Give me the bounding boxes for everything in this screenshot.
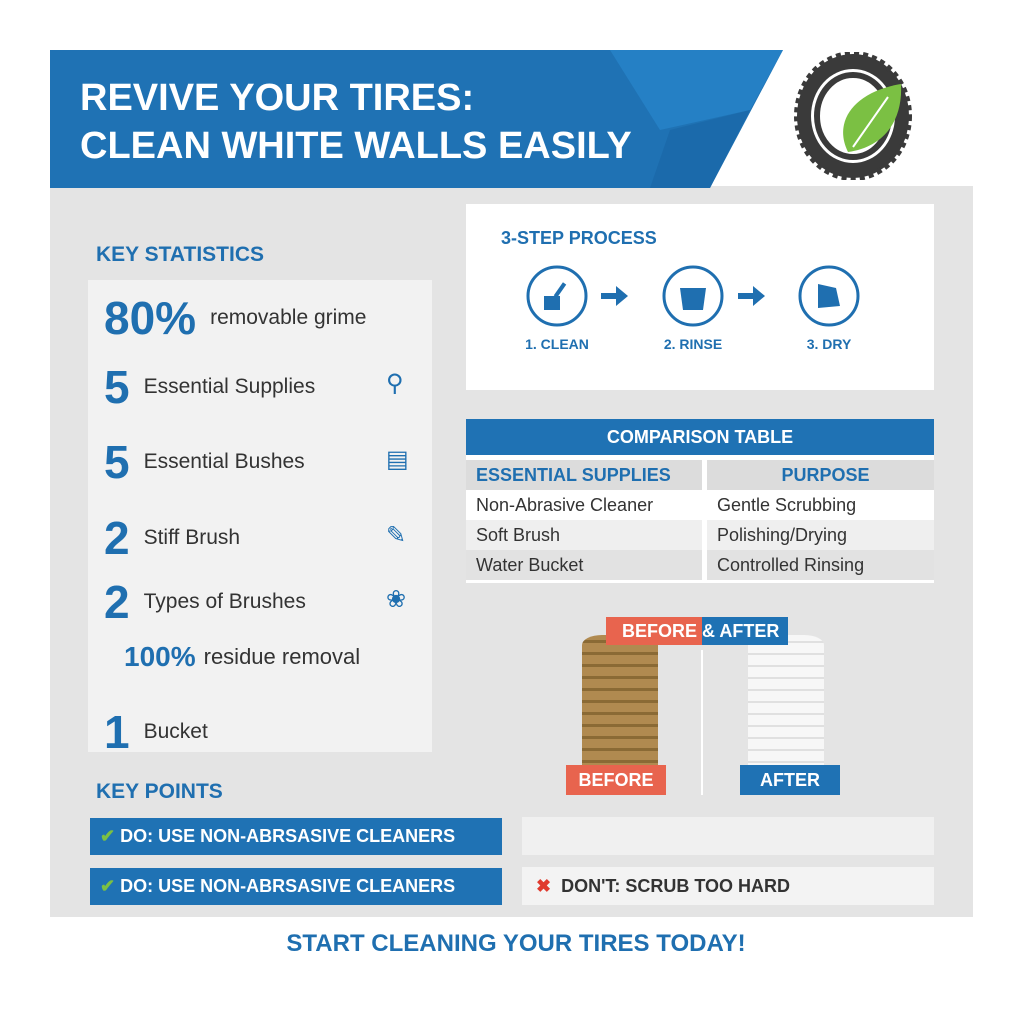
comparison table: Gentle Scrubbing	[717, 495, 856, 515]
comparison table: Polishing/Drying	[717, 525, 847, 545]
stat 80%	[104, 292, 366, 344]
stat 2 stiff brush: Stiff Brush	[144, 526, 240, 549]
background panel	[50, 186, 973, 917]
steps	[525, 266, 860, 352]
footer call to action: START CLEANING YOUR TIRES TODAY!	[286, 930, 746, 957]
panel: 3-step process	[466, 204, 934, 390]
icons: stat icons: ✎	[386, 522, 406, 549]
do point 2	[90, 868, 502, 905]
panel: statistics	[88, 280, 432, 752]
icons: stat icons: ❀	[386, 586, 406, 613]
stat 2 stiff brush	[104, 512, 240, 564]
heading: 3-step: 3-STEP PROCESS	[501, 228, 657, 248]
stat 5 bushes	[104, 436, 305, 488]
before & after: AFTER	[760, 770, 820, 790]
stat 2 types: 2	[104, 576, 130, 628]
steps: 3. DRY	[807, 336, 852, 352]
stat 80%: 80%	[104, 292, 196, 344]
comparison table	[466, 419, 934, 583]
stat 2 types	[104, 576, 306, 628]
do point 2: ✔ DO: USE NON-ABRSASIVE CLEANERS	[100, 876, 455, 896]
title: CLEAN WHITE WALLS EASILY	[80, 125, 632, 167]
before & after	[566, 617, 840, 795]
empty box	[522, 817, 934, 855]
heading: key points: KEY POINTS	[96, 780, 223, 803]
icon: tire logo with leaf	[794, 52, 912, 180]
comparison table: Soft Brush	[476, 525, 560, 545]
stat 5 supplies	[104, 361, 315, 413]
icons: stat icons: ▤	[386, 446, 409, 473]
stat 100%: residue removal	[204, 644, 360, 669]
stat 1 bucket: Bucket	[144, 720, 208, 743]
icons: stat icons	[386, 370, 409, 613]
stat 5 supplies: Essential Supplies	[144, 375, 315, 398]
do point 1: ✔ DO: USE NON-ABRSASIVE CLEANERS	[100, 826, 455, 846]
heading: key statistics: KEY STATISTICS	[96, 243, 264, 266]
stat 80%: removable grime	[210, 306, 366, 329]
before & after: & AFTER	[702, 621, 779, 641]
icons: stat icons: ⚲	[386, 370, 404, 397]
comparison table: Water Bucket	[476, 555, 583, 575]
stat 1 bucket	[104, 706, 208, 758]
comparison table: Non-Abrasive Cleaner	[476, 495, 653, 515]
dont point: ✖ DON'T: SCRUB TOO HARD	[536, 876, 790, 896]
title: REVIVE YOUR TIRES:	[80, 77, 474, 119]
comparison table: PURPOSE	[781, 465, 870, 485]
comparison table: Controlled Rinsing	[717, 555, 864, 575]
comparison table: COMPARISON TABLE	[607, 427, 793, 447]
stat 2 types: Types of Brushes	[144, 590, 306, 613]
stat 5 supplies: 5	[104, 361, 130, 413]
before & after: BEFORE	[622, 621, 697, 641]
stat 1 bucket: 1	[104, 706, 130, 758]
stat 100%: 100%	[124, 641, 196, 672]
stat 2 stiff brush: 2	[104, 512, 130, 564]
before & after: BEFORE	[578, 770, 654, 790]
steps: 2. RINSE	[664, 336, 722, 352]
stat 5 bushes: 5	[104, 436, 130, 488]
title	[80, 77, 632, 167]
do point 1	[90, 818, 502, 855]
header banner	[50, 50, 783, 188]
stat 5 bushes: Essential Bushes	[144, 450, 305, 473]
steps: 1. CLEAN	[525, 336, 589, 352]
comparison table: ESSENTIAL SUPPLIES	[476, 465, 671, 485]
dont point	[522, 867, 934, 905]
stat 100%	[124, 641, 360, 672]
